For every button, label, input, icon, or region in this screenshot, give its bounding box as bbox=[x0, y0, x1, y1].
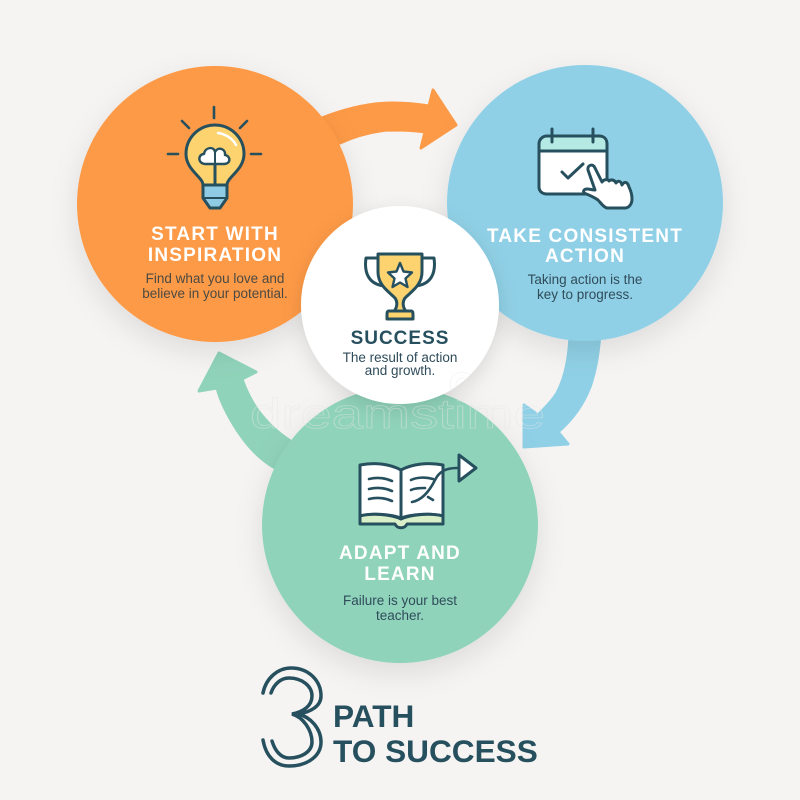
panel: take consistent action: ACTION bbox=[545, 246, 625, 267]
text: action description: Taking action is the bbox=[528, 272, 642, 287]
icon: light bulb bbox=[168, 107, 261, 208]
title: path to success: TO SUCCESS bbox=[333, 733, 538, 769]
text: success description: The result of action bbox=[343, 350, 457, 365]
panel: success: and growth. bbox=[365, 363, 435, 378]
arrow: green to orange bbox=[199, 353, 292, 468]
panel: take consistent action bbox=[447, 65, 723, 341]
heading: take consistent action: TAKE CONSISTENT bbox=[487, 226, 683, 247]
heading: success: SUCCESS bbox=[351, 328, 449, 349]
title: path to success bbox=[333, 698, 538, 769]
text: start description: Find what you love and bbox=[146, 271, 284, 286]
watermark bbox=[250, 372, 545, 437]
panel: adapt and learn bbox=[262, 387, 538, 663]
heading: start with inspiration: START WITH bbox=[151, 224, 279, 245]
heading: adapt and learn: ADAPT AND bbox=[339, 543, 461, 564]
icon: calendar with hand bbox=[539, 129, 632, 208]
panel: adapt and learn: teacher. bbox=[376, 608, 424, 623]
panel: start with inspiration: INSPIRATION bbox=[148, 245, 282, 266]
icon: trophy bbox=[366, 254, 434, 319]
panel: start with inspiration: believe in your potential. bbox=[142, 286, 288, 301]
arrow: blue to green bbox=[524, 335, 600, 447]
watermark: dreamstime bbox=[250, 390, 545, 437]
panel: success bbox=[301, 206, 499, 404]
arrow: orange to blue bbox=[322, 90, 456, 148]
panel: take consistent action: key to progress. bbox=[537, 287, 633, 302]
panel: start with inspiration bbox=[77, 66, 353, 342]
title: numeral 3 bbox=[263, 668, 321, 766]
panel: adapt and learn: LEARN bbox=[364, 564, 436, 585]
title: path to success: PATH bbox=[333, 698, 414, 734]
text: adapt description: Failure is your best bbox=[343, 593, 457, 608]
icon: open book with arrow bbox=[360, 455, 476, 528]
